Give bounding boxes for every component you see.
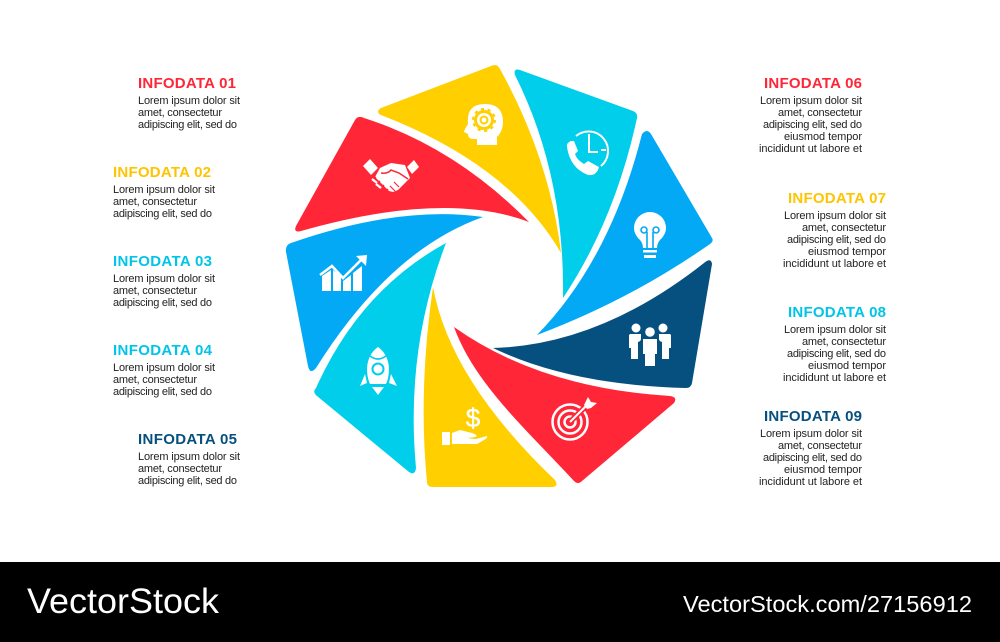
text block: infodata 03: adipiscing elit, sed do [113,297,212,309]
text block: infodata 02 [113,164,215,220]
icon: hand holding dollar: $ [466,403,481,433]
text block: infodata 06: Lorem ipsum dolor sit [760,95,862,107]
text block: infodata 06: INFODATA 06 [764,75,862,92]
footer bar [0,562,1000,642]
text block: infodata 01: amet, consectetur [138,107,222,119]
text block: infodata 04: amet, consectetur [113,374,197,386]
text block: infodata 07: INFODATA 07 [788,190,886,207]
panel: swirl segment 5 navy with team [493,260,712,388]
text block: infodata 02: adipiscing elit, sed do [113,208,212,220]
text block: infodata 03 [113,253,215,309]
text block: infodata 01 [138,75,240,131]
icon: head with gear [464,104,503,145]
text block: infodata 02: Lorem ipsum dolor sit [113,184,215,196]
text block: infodata 09: amet, consectetur [778,440,862,452]
text block: infodata 07: adipiscing elit, sed do [787,234,886,246]
text block: infodata 08: adipiscing elit, sed do [787,348,886,360]
text block: infodata 09: incididunt ut labore et [759,476,862,488]
panel: swirl segment 6 red with target [454,327,675,483]
text block: infodata 01: INFODATA 01 [138,75,236,92]
text block: infodata 06: adipiscing elit, sed do [763,119,862,131]
icon: phone and clock [567,131,608,175]
text block: infodata 05 [138,431,240,487]
text block: infodata 05: adipiscing elit, sed do [138,475,237,487]
icon: bar chart with arrow [320,255,367,291]
text block: infodata 06 [759,75,862,155]
icon: hand holding dollar [442,403,487,445]
panel: swirl segment 2 yellow with head [378,65,561,253]
text block: infodata 07 [783,190,886,270]
text block: infodata 08 [783,304,886,384]
text block: infodata 09: Lorem ipsum dolor sit [760,428,862,440]
text block: infodata 05: Lorem ipsum dolor sit [138,451,240,463]
text block: infodata 08: Lorem ipsum dolor sit [784,324,886,336]
text block: infodata 03: Lorem ipsum dolor sit [113,273,215,285]
text block: infodata 08: amet, consectetur [802,336,886,348]
text block: infodata 06: eiusmod tempor [784,131,862,143]
text block: infodata 04: INFODATA 04 [113,342,213,359]
text block: infodata 04: adipiscing elit, sed do [113,386,212,398]
text block: infodata 02: amet, consectetur [113,196,197,208]
text block: infodata 08: incididunt ut labore et [783,372,886,384]
panel: swirl segment 7 yellow with hand and dollar [424,287,556,487]
footer image id: VectorStock.com/27156912 [683,591,972,617]
text block: infodata 04: Lorem ipsum dolor sit [113,362,215,374]
text block: infodata 03: INFODATA 03 [113,253,212,270]
icon: rocket [360,347,397,395]
text block: infodata 09: INFODATA 09 [764,408,862,425]
text block: infodata 03: amet, consectetur [113,285,197,297]
text block: infodata 09: adipiscing elit, sed do [763,452,862,464]
icon: light bulb [634,212,666,258]
text block: infodata 07: amet, consectetur [802,222,886,234]
text block: infodata 09: eiusmod tempor [784,464,862,476]
text block: infodata 01: adipiscing elit, sed do [138,119,237,131]
text block: infodata 09 [759,408,862,488]
text block: infodata 07: eiusmod tempor [808,246,886,258]
text block: infodata 04 [113,342,215,398]
text block: infodata 08: INFODATA 08 [788,304,886,321]
text block: infodata 08: eiusmod tempor [808,360,886,372]
footer logo text: VectorStock [27,582,220,621]
icon: handshake [363,159,419,192]
panel: swirl segment 9 blue with chart [286,214,483,371]
icon: team of people [629,324,671,366]
text block: infodata 05: INFODATA 05 [138,431,237,448]
text block: infodata 07: Lorem ipsum dolor sit [784,210,886,222]
text block: infodata 05: amet, consectetur [138,463,222,475]
panel: swirl segment 3 cyan with phone clock [515,70,637,298]
text block: infodata 06: incididunt ut labore et [759,143,862,155]
text block: infodata 01: Lorem ipsum dolor sit [138,95,240,107]
panel: swirl segment 8 cyan with rocket [314,243,446,473]
text block: infodata 07: incididunt ut labore et [783,258,886,270]
text block: infodata 06: amet, consectetur [778,107,862,119]
panel: swirl segment 1 red with handshake [295,117,529,231]
text block: infodata 02: INFODATA 02 [113,164,211,181]
icon: target with arrow [552,397,597,440]
panel: swirl segment 4 blue with bulb [537,131,713,335]
